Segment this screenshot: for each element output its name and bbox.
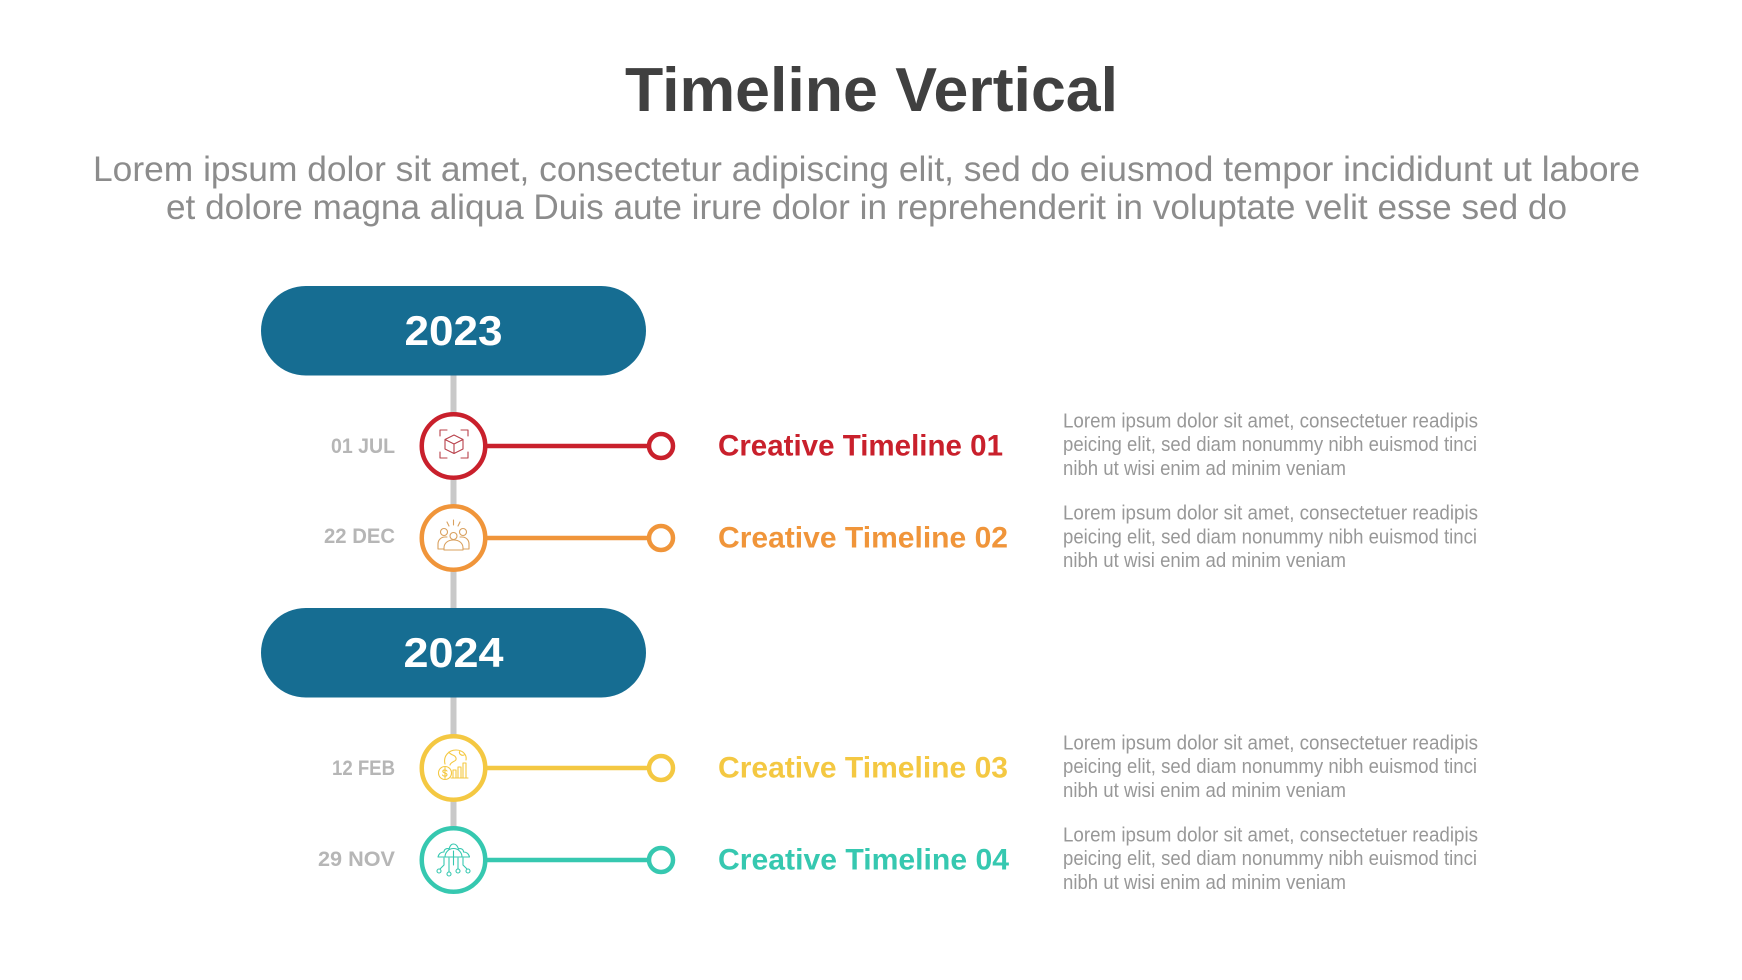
description 04: peicing elit, sed diam nonummy nibh euismod tinci: [1063, 847, 1477, 870]
description 01: peicing elit, sed diam nonummy nibh euismod tinci: [1063, 433, 1477, 456]
year pill: 2024: [261, 608, 646, 698]
vertical timeline spine: [450, 370, 456, 860]
description 02: nibh ut wisi enim ad minim veniam: [1063, 549, 1346, 572]
description 04: nibh ut wisi enim ad minim veniam: [1063, 871, 1346, 894]
icon: globe with coin and bars: [422, 736, 485, 800]
description 02: Lorem ipsum dolor sit amet, consectetuer readipis: [1063, 502, 1478, 524]
description 02: peicing elit, sed diam nonummy nibh euismod tinci: [1063, 526, 1477, 548]
subtitle text block: Lorem ipsum dolor sit amet, consectetur adipiscing elit, sed do eiusmod tempor incididunt ut labore: [93, 150, 1640, 189]
label: Creative Timeline 01: Creative Timeline 01: [718, 430, 1003, 462]
description 04: [1063, 824, 1478, 894]
subtitle text block: et dolore magna aliqua Duis aute irure dolor in reprehenderit in voluptate velit esse sed do: [166, 188, 1567, 227]
icon: cloud gear network: [422, 828, 485, 892]
timeline item 03: [332, 732, 1478, 802]
timeline item 04: [318, 824, 1478, 894]
description 03: peicing elit, sed diam nonummy nibh euismod tinci: [1063, 755, 1477, 778]
description 02: [1063, 502, 1478, 572]
date: 29 NOV: 29 NOV: [318, 848, 395, 871]
connector and end node 01: [485, 434, 673, 458]
title: Timeline Vertical: [625, 56, 1118, 125]
date: 22 DEC: 22 DEC: [324, 525, 395, 548]
connector and end node 04: [485, 848, 673, 872]
timeline item 02: [324, 502, 1478, 572]
date: 12 FEB: 12 FEB: [332, 757, 395, 780]
description 01: nibh ut wisi enim ad minim veniam: [1063, 457, 1346, 480]
date: 01 JUL: 01 JUL: [331, 435, 395, 458]
year pill: 2023: [261, 286, 646, 376]
description 04: Lorem ipsum dolor sit amet, consectetuer readipis: [1063, 824, 1478, 846]
description 03: nibh ut wisi enim ad minim veniam: [1063, 779, 1346, 802]
icon: cube in focus frame: [422, 414, 485, 478]
description 03: [1063, 732, 1478, 802]
description 01: [1063, 410, 1478, 480]
description 01: Lorem ipsum dolor sit amet, consectetuer readipis: [1063, 410, 1478, 432]
icon: group of people: [422, 506, 485, 570]
timeline item 01: [331, 410, 1478, 480]
year pill: 2023: 2023: [404, 307, 502, 354]
label: Creative Timeline 02: Creative Timeline 02: [718, 522, 1008, 554]
label: Creative Timeline 04: Creative Timeline 04: [718, 844, 1009, 876]
year pill: 2024: 2024: [404, 629, 504, 676]
label: Creative Timeline 03: Creative Timeline 03: [718, 752, 1008, 784]
connector and end node 02: [485, 526, 673, 550]
subtitle text block: [93, 150, 1640, 227]
connector and end node 03: [485, 756, 673, 780]
description 03: Lorem ipsum dolor sit amet, consectetuer readipis: [1063, 732, 1478, 754]
